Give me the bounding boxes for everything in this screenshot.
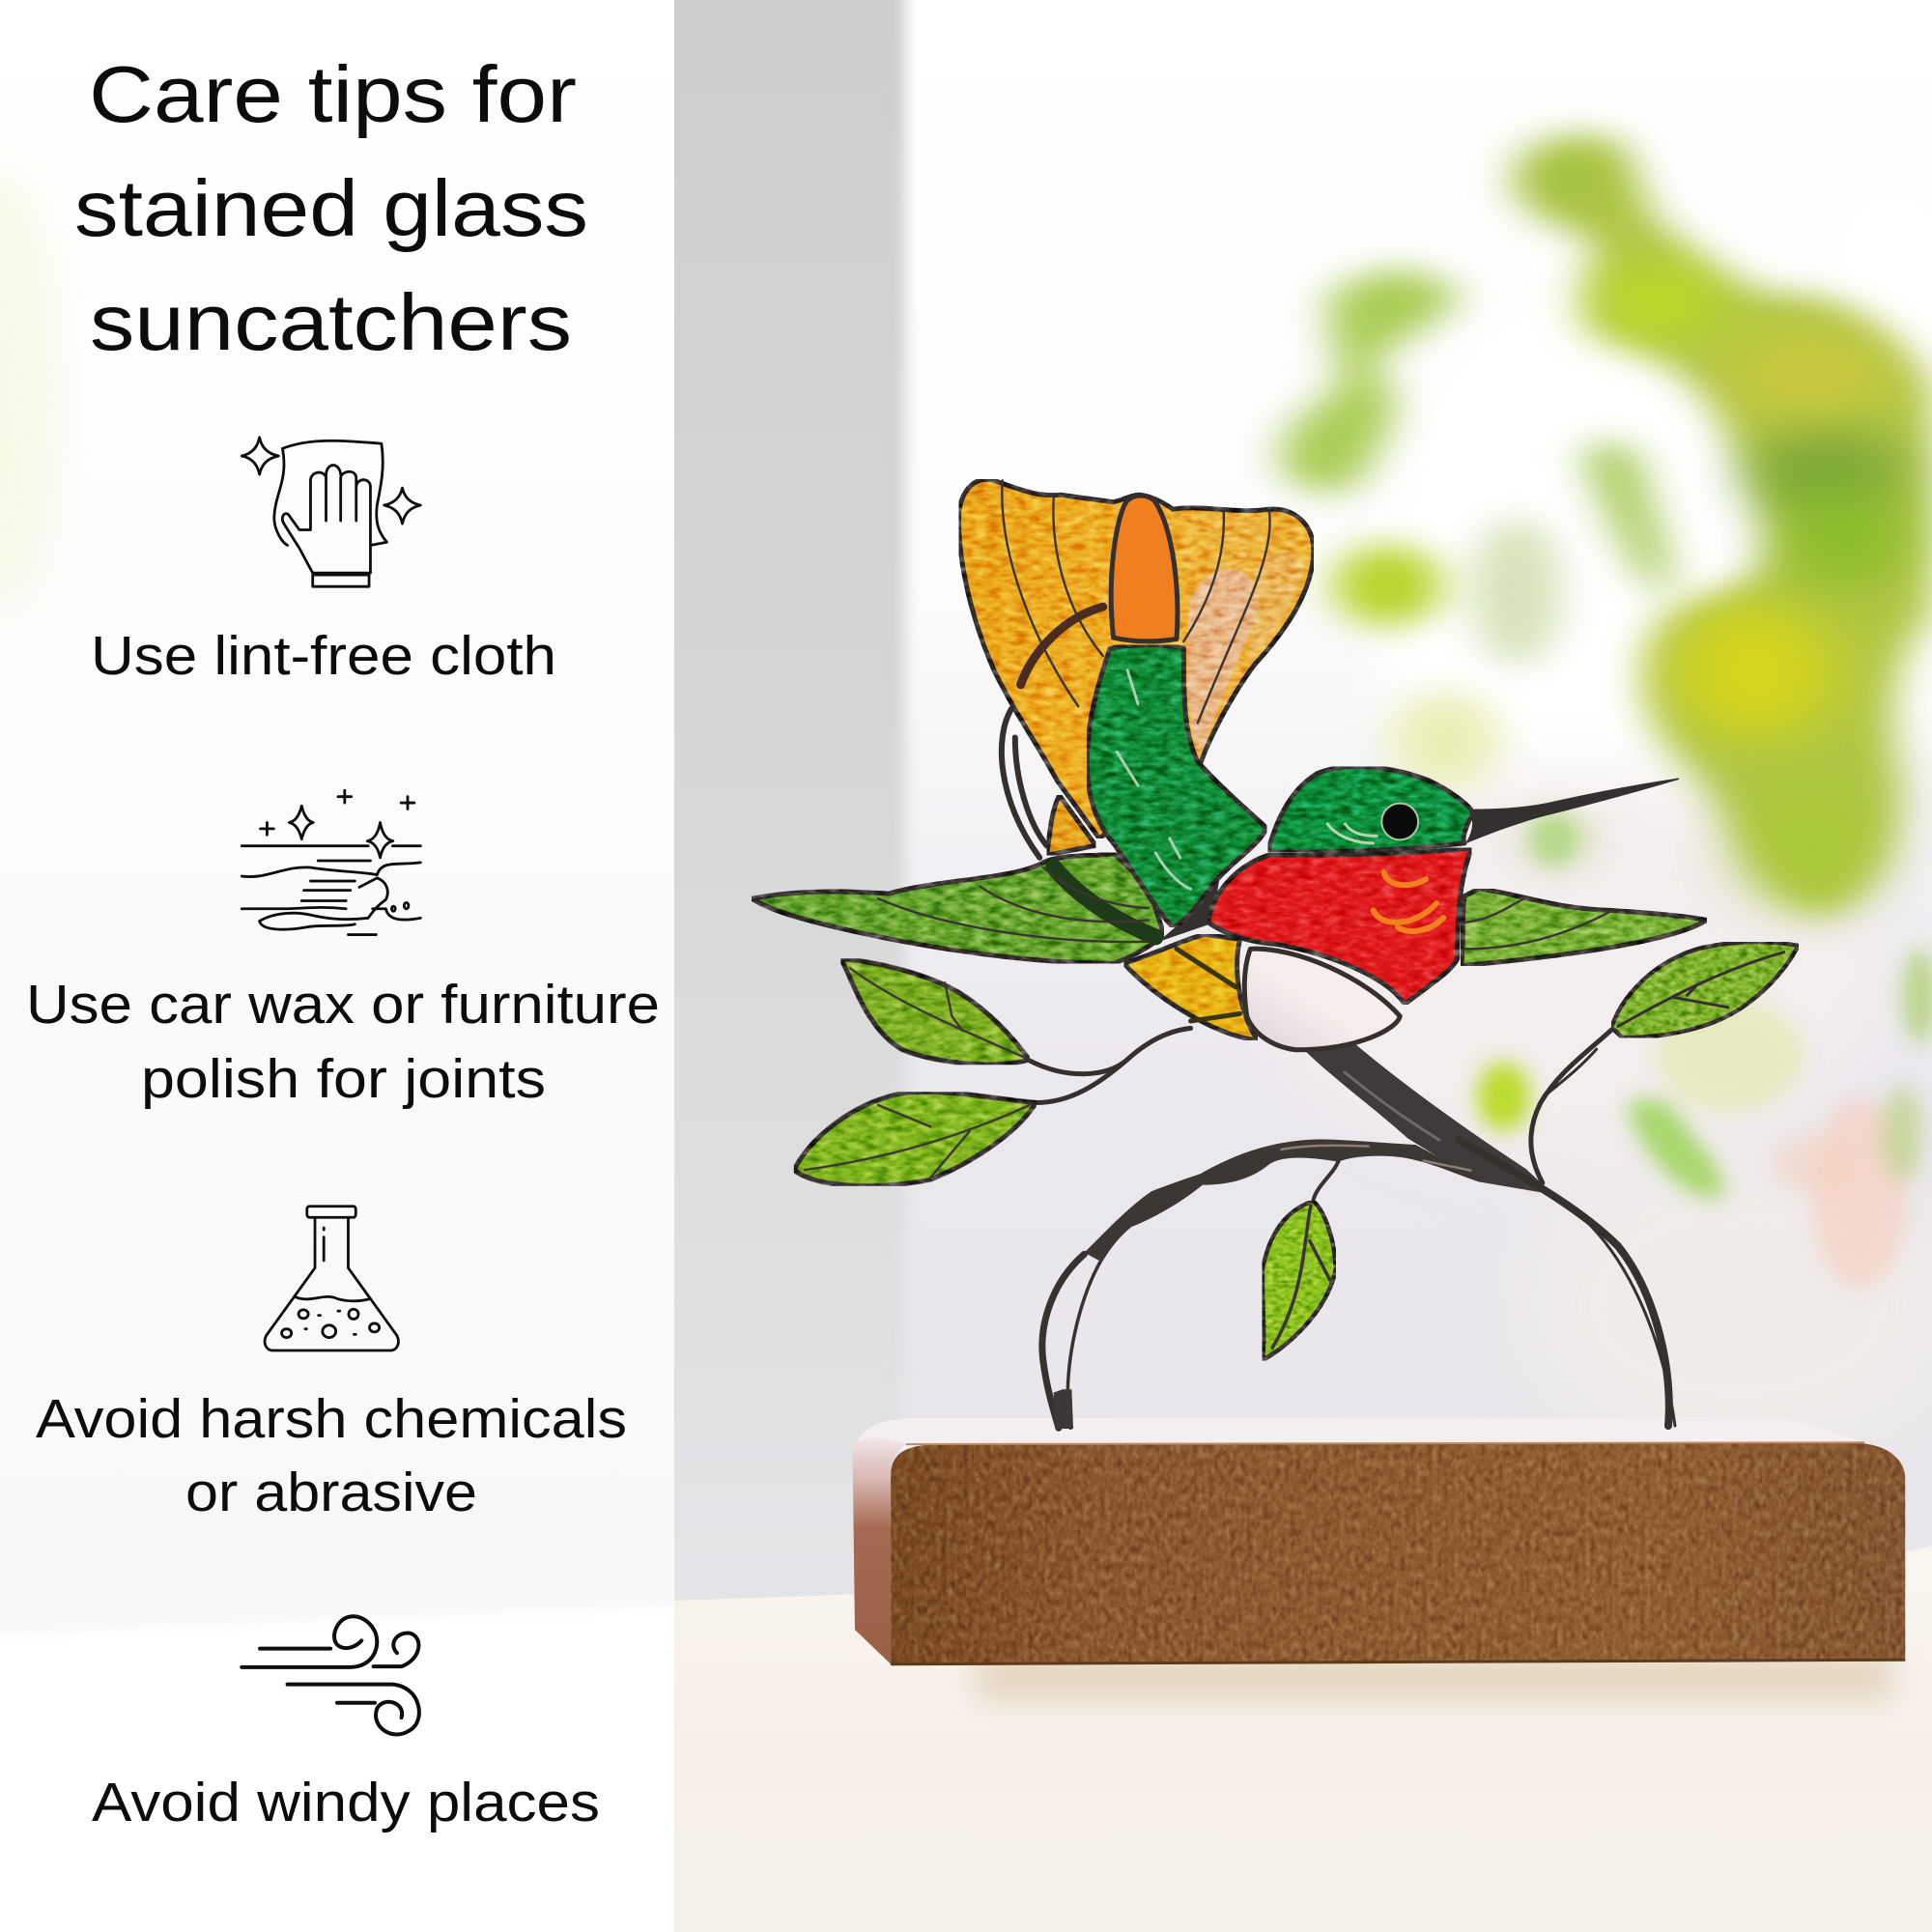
title: [74, 49, 588, 367]
label: Avoid windy places: [92, 1772, 600, 1833]
left foot wires: [1042, 1254, 1084, 1428]
lower flower piece: [1047, 795, 1095, 855]
flower veins: [1002, 480, 1270, 724]
top surface of base: [855, 1417, 1868, 1451]
left side of base: [853, 1438, 906, 1664]
head lines: [1327, 824, 1377, 843]
right wing: [1461, 889, 1707, 966]
left leaf upper: [841, 958, 1029, 1065]
right leaf stem: [1531, 1030, 1611, 1183]
twigs left: [1029, 1028, 1191, 1102]
icon: flask: [265, 1207, 398, 1350]
tip: car wax or polish: [26, 790, 660, 1110]
lead joint at wing root: [1162, 877, 1219, 939]
bird and flower: [752, 479, 1707, 1186]
right leaf veins: [1618, 952, 1784, 1026]
right leaf, stem and beak: [1467, 779, 1799, 1183]
right arch wire: [1459, 1140, 1675, 1426]
icon: hand polishing surface: [242, 790, 420, 935]
body highlights: [1117, 670, 1191, 889]
tip: avoid harsh chemicals: [36, 1207, 627, 1523]
soft green tint: [0, 164, 58, 609]
lower bright table zone: [0, 1604, 734, 1932]
tip: lint-free cloth: [91, 438, 556, 687]
tail feather stem: [1297, 1043, 1553, 1195]
title: suncatchers: [90, 277, 572, 367]
label: [36, 1388, 627, 1523]
orange throat marks: [1374, 872, 1443, 931]
panel background: [0, 0, 674, 1932]
title: stained glass: [74, 163, 588, 253]
tip: avoid windy places: [92, 1616, 600, 1833]
base shadow on table: [976, 1654, 1893, 1700]
label: or abrasive: [185, 1462, 477, 1523]
blurred foliage: [1281, 139, 1931, 919]
green body: [1087, 645, 1266, 927]
wire branches: [1042, 1043, 1553, 1429]
hummingbird suncatcher stand: [752, 479, 1905, 1664]
main twisted branch: [1084, 1139, 1479, 1263]
label: [26, 974, 660, 1110]
left leaf lower: [794, 1092, 1037, 1186]
lower-right blurred foliage and pink flower: [1477, 816, 1932, 1289]
head: [1268, 767, 1473, 852]
beak: [1467, 779, 1678, 842]
wire loop left of flower: [1002, 709, 1047, 858]
flower petals: [959, 479, 1314, 838]
window pillar: [618, 0, 905, 1642]
icon: wind: [242, 1616, 419, 1734]
branch highlights: [1282, 1146, 1470, 1171]
label: Use lint-free cloth: [91, 625, 556, 687]
foliage colour variation: [1530, 145, 1907, 906]
hanging leaf stem: [1313, 1161, 1339, 1201]
wooden base: [853, 1417, 1905, 1664]
right leaf: [1611, 942, 1799, 1037]
left wing: [752, 853, 1164, 963]
white belly: [1244, 949, 1400, 1050]
table top: [674, 1546, 1932, 1932]
dark curved stem behind flower: [1021, 607, 1103, 685]
small hanging leaf: [1263, 1201, 1336, 1360]
yellow lower body: [1123, 934, 1258, 1040]
eye: [1381, 804, 1418, 839]
left tips panel: [0, 0, 734, 1932]
bright window highlights: [1256, 174, 1932, 1459]
label: polish for joints: [141, 1048, 546, 1110]
orange flower pistil: [1111, 496, 1178, 641]
label: Avoid harsh chemicals: [36, 1388, 627, 1450]
red throat: [1208, 848, 1471, 1005]
title: Care tips for: [89, 49, 577, 139]
icon: hand with cloth: [242, 438, 420, 586]
label: Use car wax or furniture: [26, 974, 660, 1036]
wood front face: [891, 1443, 1905, 1664]
